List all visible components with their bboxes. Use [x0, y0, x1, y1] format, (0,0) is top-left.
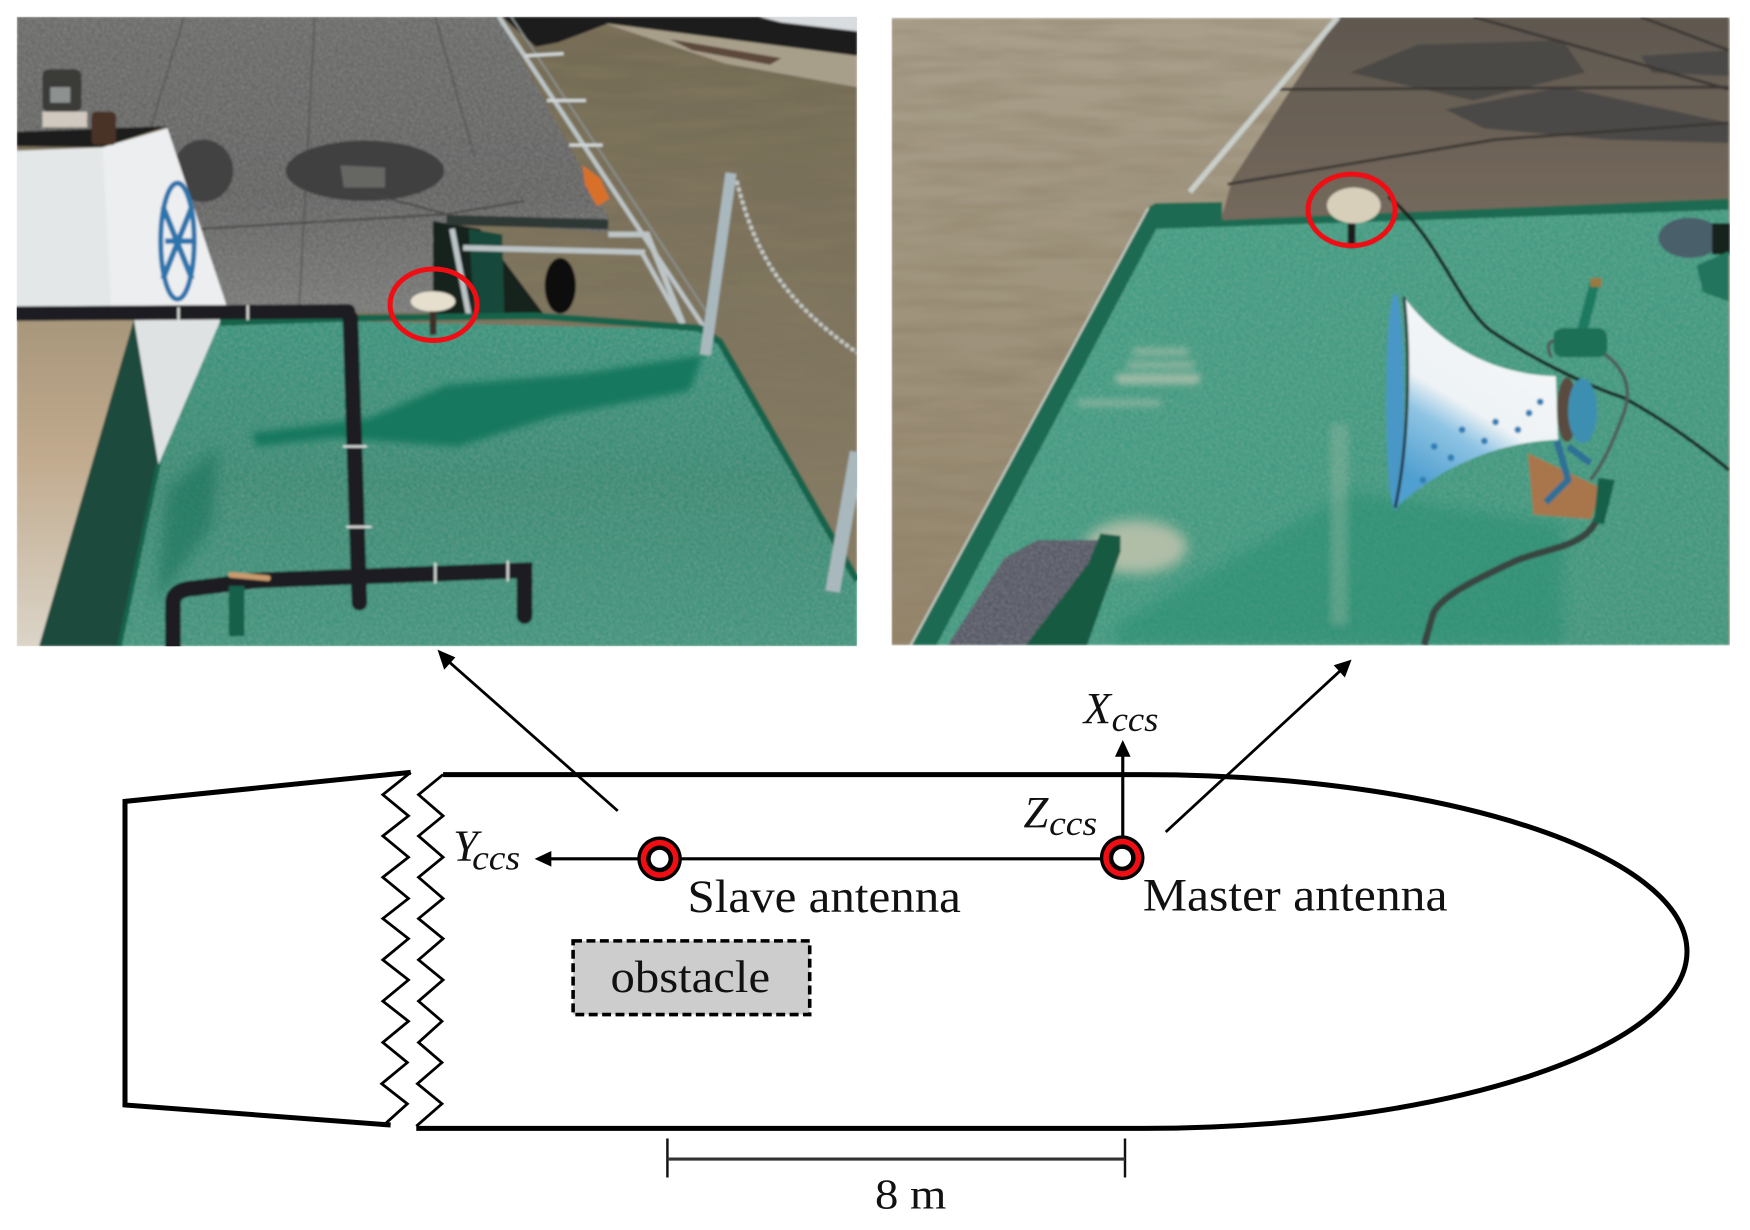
- horn loudspeaker: [1386, 294, 1597, 510]
- black insulated pipes: [17, 306, 525, 645]
- carpet mat: [948, 540, 1099, 645]
- bracket: [1546, 441, 1590, 502]
- silver rails: [452, 17, 714, 326]
- obstacle box: obstacle: [610, 951, 770, 1002]
- orange buoy: [583, 165, 609, 207]
- winch: [1554, 278, 1607, 357]
- Z axis label: ccs: [1049, 805, 1097, 843]
- green deck: [112, 318, 857, 646]
- lantern and chimney: [42, 69, 116, 145]
- lower hose: [1424, 519, 1597, 645]
- dark green fin: [1026, 534, 1121, 645]
- water shadow on deck: [251, 355, 703, 446]
- X axis arrow: [1115, 740, 1131, 839]
- water surface right photo: [892, 18, 1730, 645]
- black cable: [1388, 196, 1729, 470]
- water surface left photo: [17, 17, 857, 646]
- lower cabin: tan top and dark green side: [17, 319, 221, 646]
- cable loop: [1548, 340, 1627, 480]
- darker band on deck: [1116, 491, 1562, 645]
- arrow to right photo: [1166, 660, 1352, 832]
- red highlight circle: [390, 269, 477, 340]
- salt streaks on deck: [1077, 348, 1348, 625]
- right break zigzag: [416, 775, 443, 1126]
- master antenna marker: [1100, 835, 1145, 880]
- red highlight circle: [1308, 174, 1395, 246]
- slave antenna label: Slave antenna: [688, 871, 961, 923]
- antenna on post: [411, 291, 455, 335]
- deck railing: [1190, 17, 1338, 192]
- deck rim: [220, 316, 857, 580]
- brown tarpaulin: [1221, 17, 1729, 220]
- moored boat: [502, 17, 857, 87]
- antenna on post: [1327, 188, 1381, 248]
- master antenna label: Master antenna: [1143, 870, 1448, 922]
- salt patch near fin: [1085, 520, 1188, 574]
- arrow to left photo: [438, 650, 618, 811]
- photo: slave antenna on deck: [17, 17, 857, 646]
- grey tarpaulin: [17, 17, 608, 313]
- bow hull outline: [416, 775, 1687, 1128]
- Y axis label: ccs: [472, 839, 520, 877]
- slave antenna marker: [637, 837, 682, 881]
- Z axis label: [1023, 787, 1097, 843]
- stern section outline: [125, 772, 411, 1125]
- obstacle box: [573, 941, 810, 1015]
- dark gap and tyre below tarpaulin: [433, 220, 608, 318]
- helmet shaped device: [1658, 218, 1730, 301]
- silver pole and chain: [705, 173, 857, 592]
- Y axis label: Y: [453, 821, 482, 871]
- X axis label: [1082, 683, 1158, 739]
- white cabin wall: [17, 126, 229, 313]
- left break zigzag: [382, 772, 411, 1124]
- photo: master antenna on deck: [892, 17, 1730, 645]
- mounting plate: [1528, 453, 1600, 519]
- ship schematic: [125, 772, 1687, 1128]
- 8 m scale bar: 8 m: [875, 1172, 946, 1219]
- Y axis label: [453, 821, 520, 877]
- X axis label: X: [1082, 683, 1113, 733]
- Z axis label: Z: [1023, 787, 1049, 837]
- deck rim: [911, 199, 1729, 645]
- baseline with Y axis arrow: [535, 851, 1116, 867]
- 8 m scale bar: [667, 1138, 1125, 1219]
- X axis label: ccs: [1112, 701, 1158, 739]
